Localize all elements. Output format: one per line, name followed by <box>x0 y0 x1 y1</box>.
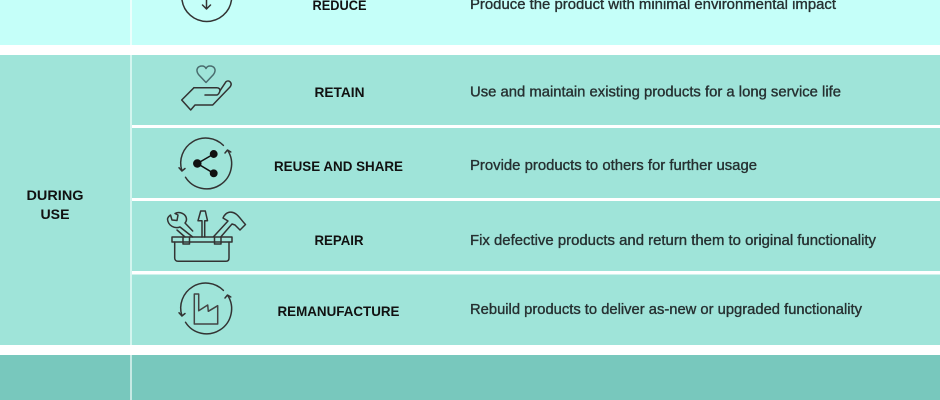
panel: after use <box>0 355 940 400</box>
label: remanufacture: REMANUFACTURE <box>278 303 400 319</box>
row: remanufacture <box>179 283 863 334</box>
panel: before use <box>0 0 940 45</box>
row: reuse and share <box>179 138 757 189</box>
description: retain: Use and maintain existing products for a long service life <box>470 84 841 100</box>
label: repair: REPAIR <box>314 232 364 248</box>
icon: toolbox <box>168 211 246 261</box>
description: repair: Fix defective products and return them to original functionality <box>470 233 877 249</box>
icon: reduce <box>182 0 232 21</box>
description: remanufacture: Rebuild products to deliver as-new or upgraded functionality <box>470 302 863 318</box>
during use category label: DURING <box>26 187 84 203</box>
label: reuse and share: REUSE AND SHARE <box>274 158 403 174</box>
row: retain <box>182 66 841 110</box>
description: reuse and share: Provide products to others for further usage <box>470 158 757 174</box>
during use category label: USE <box>40 206 70 222</box>
label: retain: RETAIN <box>314 84 364 100</box>
icon: hand with heart <box>182 66 231 110</box>
during use category label <box>26 187 84 222</box>
panel: during use <box>0 55 940 345</box>
icon: factory in cycle <box>179 283 232 334</box>
icon: share in cycle <box>179 138 232 189</box>
row: repair <box>168 211 877 261</box>
